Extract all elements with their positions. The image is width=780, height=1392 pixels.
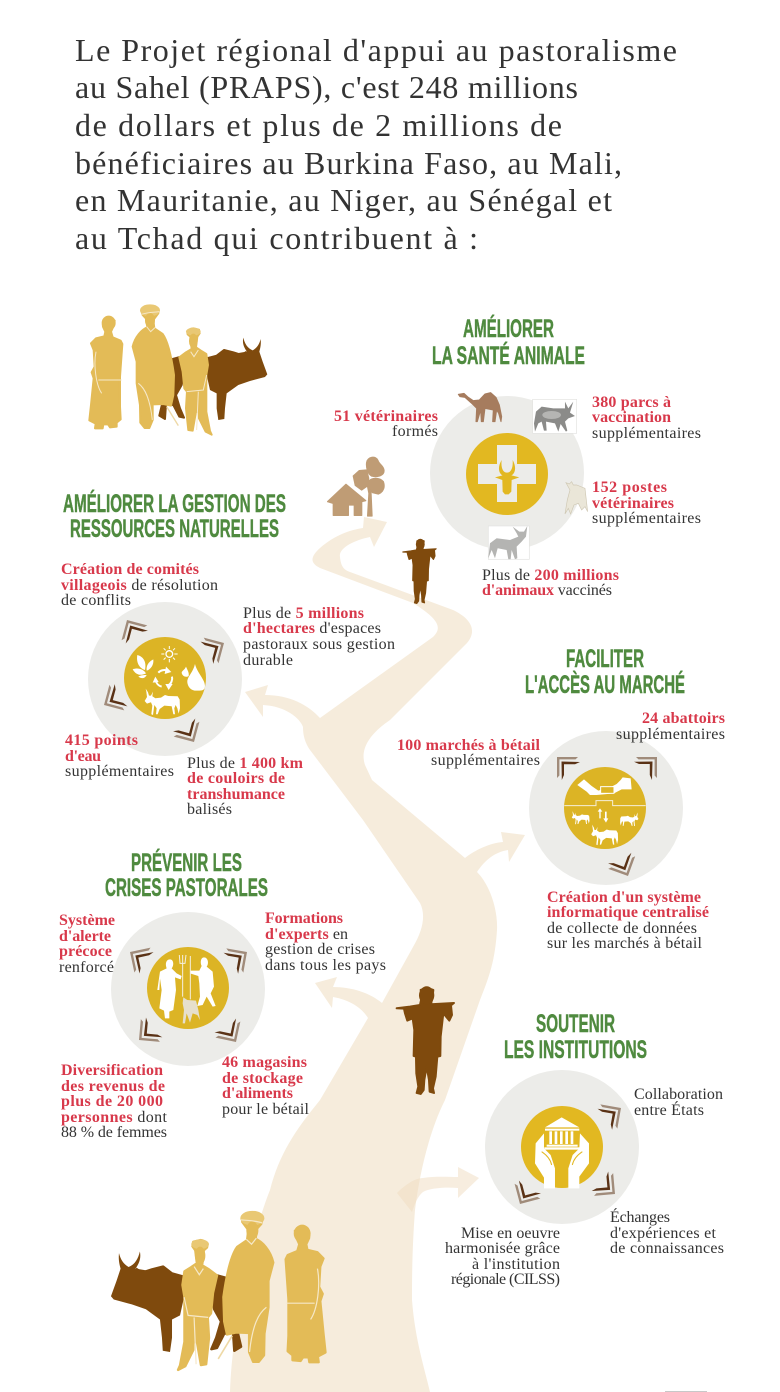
- panel: pastoral crises: [59, 848, 386, 1141]
- heading: pastoral crises: PRÉVENIR LES: [131, 848, 242, 877]
- text: water points: [65, 732, 174, 780]
- text: early warning: d'alerte: [59, 928, 111, 945]
- image: pale zebu: [488, 526, 529, 559]
- text: income diversification: personnes dont: [61, 1109, 168, 1126]
- title: [75, 32, 677, 256]
- title: de dollars et plus de 2 millions de: [75, 107, 562, 143]
- text: corridors: balisés: [187, 801, 232, 818]
- text: vet posts: 152 postes: [592, 479, 667, 496]
- circle: institutions: [485, 1070, 639, 1224]
- text: harmonised implementation: [445, 1225, 560, 1288]
- text: vets: [334, 408, 438, 440]
- text: cattle markets: [397, 737, 541, 769]
- heading: institutions: LES INSTITUTIONS: [504, 1036, 647, 1064]
- circle: natural resources: [88, 602, 242, 756]
- text: hectares: [243, 605, 395, 669]
- text: vets: 51 vétérinaires: [334, 408, 438, 425]
- text: collaboration: Collaboration: [634, 1086, 723, 1103]
- text: harmonised implementation: harmonisée grâce: [445, 1240, 560, 1257]
- heading: pastoral crises: CRISES PASTORALES: [105, 874, 268, 902]
- text: vets: formés: [392, 423, 438, 440]
- circle: market access: [529, 731, 683, 885]
- text: animals vaccinated: d'animaux vaccinés: [482, 582, 612, 599]
- title: Le Projet régional d'appui au pastoralisme: [75, 32, 677, 68]
- text: corridors: de couloirs de: [187, 770, 285, 787]
- heading: market access: FACILITER: [566, 645, 644, 673]
- text: water points: 415 points: [65, 732, 138, 749]
- text: information system: sur les marchés à bétail: [547, 935, 703, 952]
- text: vet posts: vétérinaires: [592, 495, 674, 512]
- text: storage: 46 magasins: [222, 1054, 307, 1071]
- icon: hands exchanging money and cattle: [564, 767, 646, 849]
- arrow: towards institutions: [397, 1167, 479, 1212]
- text: information system: informatique centralisé: [547, 904, 709, 921]
- text: slaughterhouses: 24 abattoirs: [642, 710, 725, 727]
- illustration: herders and cow, top: [89, 304, 267, 435]
- text: hectares: Plus de 5 millions: [243, 605, 364, 622]
- text: income diversification: plus de 20 000: [61, 1093, 163, 1110]
- icon: sun, leaves, water, cow: [124, 637, 206, 719]
- text: early warning: [59, 912, 115, 976]
- text: hectares: pastoraux sous gestion: [243, 636, 395, 653]
- text: cattle markets: 100 marchés à bétail: [397, 737, 541, 754]
- icon: two figures and goat: [147, 947, 229, 1029]
- text: exchanges: d'expériences et: [610, 1225, 717, 1242]
- text: vet posts: supplémentaires: [592, 510, 701, 527]
- heading: animal health: AMÉLIORER: [463, 314, 554, 343]
- text: committees: de conflits: [61, 592, 131, 609]
- text: information system: [547, 889, 709, 952]
- illustration: herders and cow, bottom: [111, 1211, 325, 1370]
- text: corridors: Plus de 1 400 km: [187, 755, 304, 772]
- title: au Tchad qui contribuent à :: [75, 220, 478, 256]
- text: collaboration: [634, 1086, 723, 1119]
- heading: natural resources: AMÉLIORER LA GESTION DES: [63, 489, 286, 518]
- text: committees: [61, 561, 218, 609]
- road with branching arrows: [230, 517, 525, 1392]
- circle: pastoral crises: [111, 912, 265, 1066]
- heading: animal health: [432, 314, 585, 370]
- arrows: corner chevrons: [557, 757, 657, 876]
- text: harmonised implementation: à l'institution: [472, 1256, 560, 1273]
- text: income diversification: [61, 1062, 168, 1141]
- arrows: corner chevrons: [130, 947, 247, 1042]
- icon: hands holding a temple: [521, 1106, 603, 1188]
- text: exchanges: [610, 1207, 724, 1257]
- text: income diversification: des revenus de: [61, 1078, 165, 1095]
- text: corridors: [187, 755, 304, 818]
- circle: animal health: [430, 396, 584, 550]
- heading: institutions: SOUTENIR: [536, 1010, 615, 1038]
- text: slaughterhouses: [616, 710, 725, 743]
- panel: natural resources: [61, 489, 395, 818]
- text: exchanges: Échanges: [610, 1207, 670, 1226]
- heading: pastoral crises: [105, 848, 268, 902]
- text: exchanges: de connaissances: [610, 1240, 724, 1257]
- text: committees: villageois de résolution: [61, 577, 218, 594]
- text: early warning: Système: [59, 912, 115, 929]
- text: expert training: Formations: [265, 910, 343, 927]
- text: storage: pour le bétail: [222, 1101, 310, 1118]
- text: hectares: durable: [243, 652, 293, 669]
- text: committees: Création de comités: [61, 561, 199, 578]
- heading: natural resources: RESSOURCES NATURELLES: [70, 515, 279, 543]
- image: zebu: [533, 399, 577, 433]
- title: en Mauritanie, au Niger, au Sénégal et: [75, 182, 612, 218]
- text: early warning: précoce: [59, 943, 112, 960]
- text: slaughterhouses: supplémentaires: [616, 726, 725, 743]
- text: water points: d'eau: [65, 748, 101, 765]
- text: hectares: d'hectares d'espaces: [243, 620, 381, 637]
- text: animals vaccinated: Plus de 200 millions: [482, 567, 619, 584]
- text: vaccination parks: [592, 394, 701, 442]
- heading: market access: [525, 645, 685, 699]
- text: income diversification: 88 % de femmes: [61, 1124, 167, 1141]
- text: vet posts: [592, 479, 701, 527]
- text: expert training: d'experts en: [265, 926, 348, 943]
- image: goat: [565, 482, 588, 514]
- arrows: corner chevrons: [514, 1104, 621, 1204]
- text: storage: de stockage: [222, 1070, 303, 1087]
- image: camel: [458, 393, 502, 422]
- text: early warning: renforcé: [59, 959, 114, 976]
- panel: animal health: [334, 314, 701, 599]
- text: vaccination parks: 380 parcs à: [592, 394, 671, 411]
- text: animals vaccinated: [482, 567, 619, 599]
- text: cattle markets: supplémentaires: [431, 752, 540, 769]
- panel: institutions: [445, 1010, 724, 1288]
- icon: veterinary cross with cow head: [466, 433, 548, 515]
- text: expert training: gestion de crises: [265, 941, 375, 958]
- small shepherd on the road: [403, 539, 436, 603]
- large shepherd on the road: [397, 986, 454, 1094]
- text: harmonised implementation: Mise en oeuvre: [461, 1225, 560, 1242]
- panel: market access: [397, 645, 725, 952]
- heading: animal health: LA SANTÉ ANIMALE: [432, 341, 585, 370]
- text: corridors: transhumance: [187, 786, 285, 803]
- text: storage: d'aliments: [222, 1085, 293, 1102]
- text: vaccination parks: supplémentaires: [592, 425, 701, 442]
- text: information system: Création d'un système: [547, 889, 701, 906]
- icon: village house and tree: [328, 457, 384, 516]
- title: au Sahel (PRAPS), c'est 248 millions: [75, 69, 578, 105]
- arrows: corner chevrons: [104, 620, 224, 742]
- text: harmonised implementation: régionale (CILSS): [451, 1271, 560, 1288]
- text: vaccination parks: vaccination: [592, 409, 671, 426]
- text: information system: de collecte de données: [547, 920, 697, 937]
- title: bénéficiaires au Burkina Faso, au Mali,: [75, 145, 622, 181]
- text: water points: supplémentaires: [65, 763, 174, 780]
- text: income diversification: Diversification: [61, 1062, 163, 1079]
- heading: natural resources: [63, 489, 286, 543]
- heading: institutions: [504, 1010, 647, 1064]
- text: expert training: dans tous les pays: [265, 957, 386, 974]
- text: storage: [222, 1054, 310, 1118]
- text: collaboration: entre États: [634, 1100, 704, 1119]
- text: expert training: [265, 910, 386, 974]
